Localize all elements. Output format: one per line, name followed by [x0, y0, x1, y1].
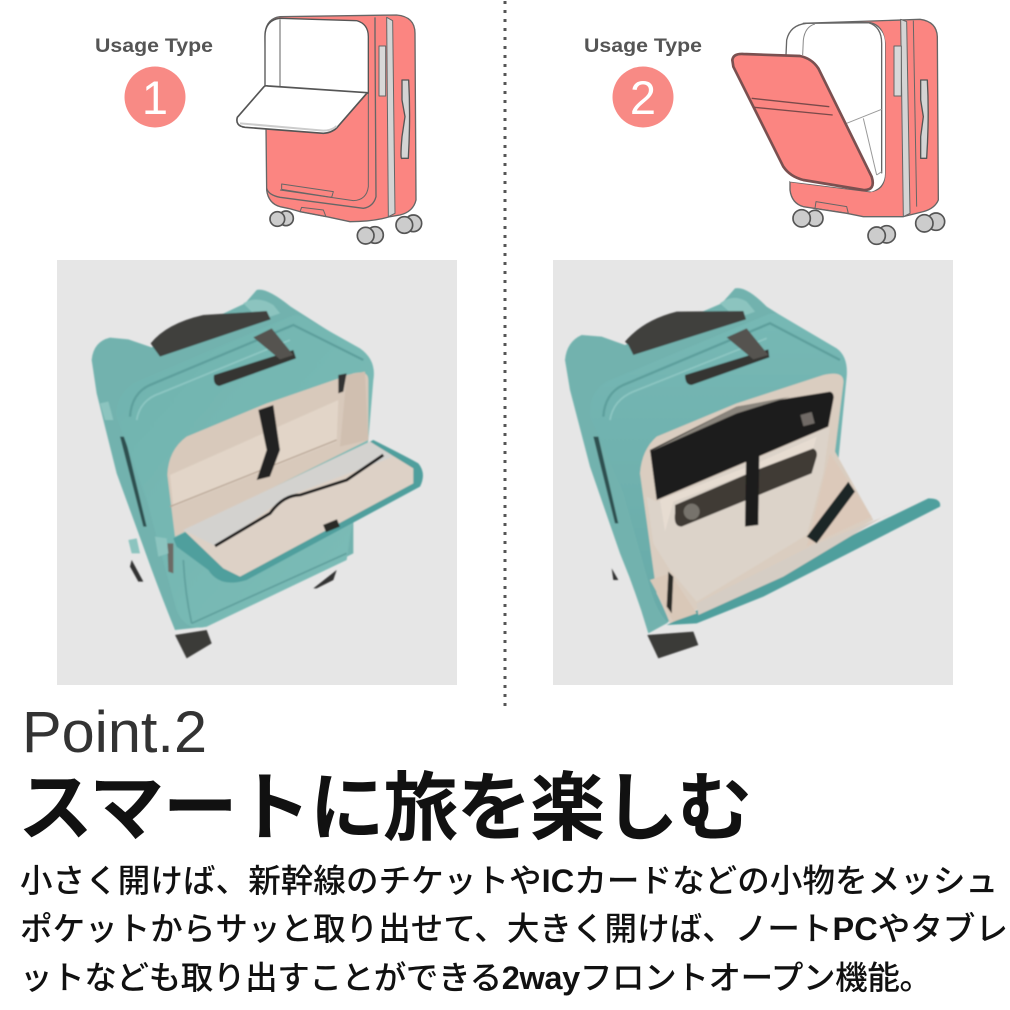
- flap rim: [173, 440, 423, 583]
- body text: [20, 863, 1008, 996]
- rear shell: [92, 290, 353, 630]
- photo panel: suitcase fully open with laptop: [553, 260, 953, 685]
- label: Usage Type 2: Usage Type: [584, 36, 702, 57]
- trolley handle: [151, 311, 271, 357]
- trolley handle: [625, 311, 746, 355]
- front face: [117, 315, 374, 628]
- flap mesh interior: [183, 442, 413, 577]
- tablet pocket: [647, 427, 830, 602]
- illustration: pink suitcase, large front opening: [732, 19, 945, 244]
- rear shell: [565, 288, 837, 633]
- laptop: [650, 392, 834, 500]
- front face: [590, 313, 847, 622]
- body text: ットなども取り出すことができる2wayフロントオープン機能。: [20, 960, 932, 996]
- interior: [640, 374, 873, 623]
- badge: number 1: [124, 66, 186, 128]
- heading: スマートに旅を楽しむ: [18, 766, 752, 850]
- label: Point.2: Point.2: [22, 700, 207, 765]
- flap mesh and rim: [667, 498, 940, 625]
- illustration: pink suitcase, small front opening: [237, 15, 422, 244]
- badge: number 2: 2: [630, 71, 656, 124]
- photo panel: suitcase half open: [57, 260, 457, 685]
- body text: 小さく開けば、新幹線のチケットやICカードなどの小物をメッシュ: [20, 863, 998, 899]
- body text: ポケットからサッと取り出せて、大きく開けば、ノートPCやタブレ: [20, 911, 1008, 947]
- badge: number 1: 1: [142, 71, 168, 124]
- combination lock: [685, 349, 769, 385]
- strap: [745, 412, 760, 527]
- badge: number 2: [612, 66, 674, 128]
- label: Usage Type 1: Usage Type: [95, 36, 213, 57]
- combination lock: [214, 350, 296, 386]
- center dotted divider: [504, 1, 506, 706]
- interior lining: [167, 372, 368, 537]
